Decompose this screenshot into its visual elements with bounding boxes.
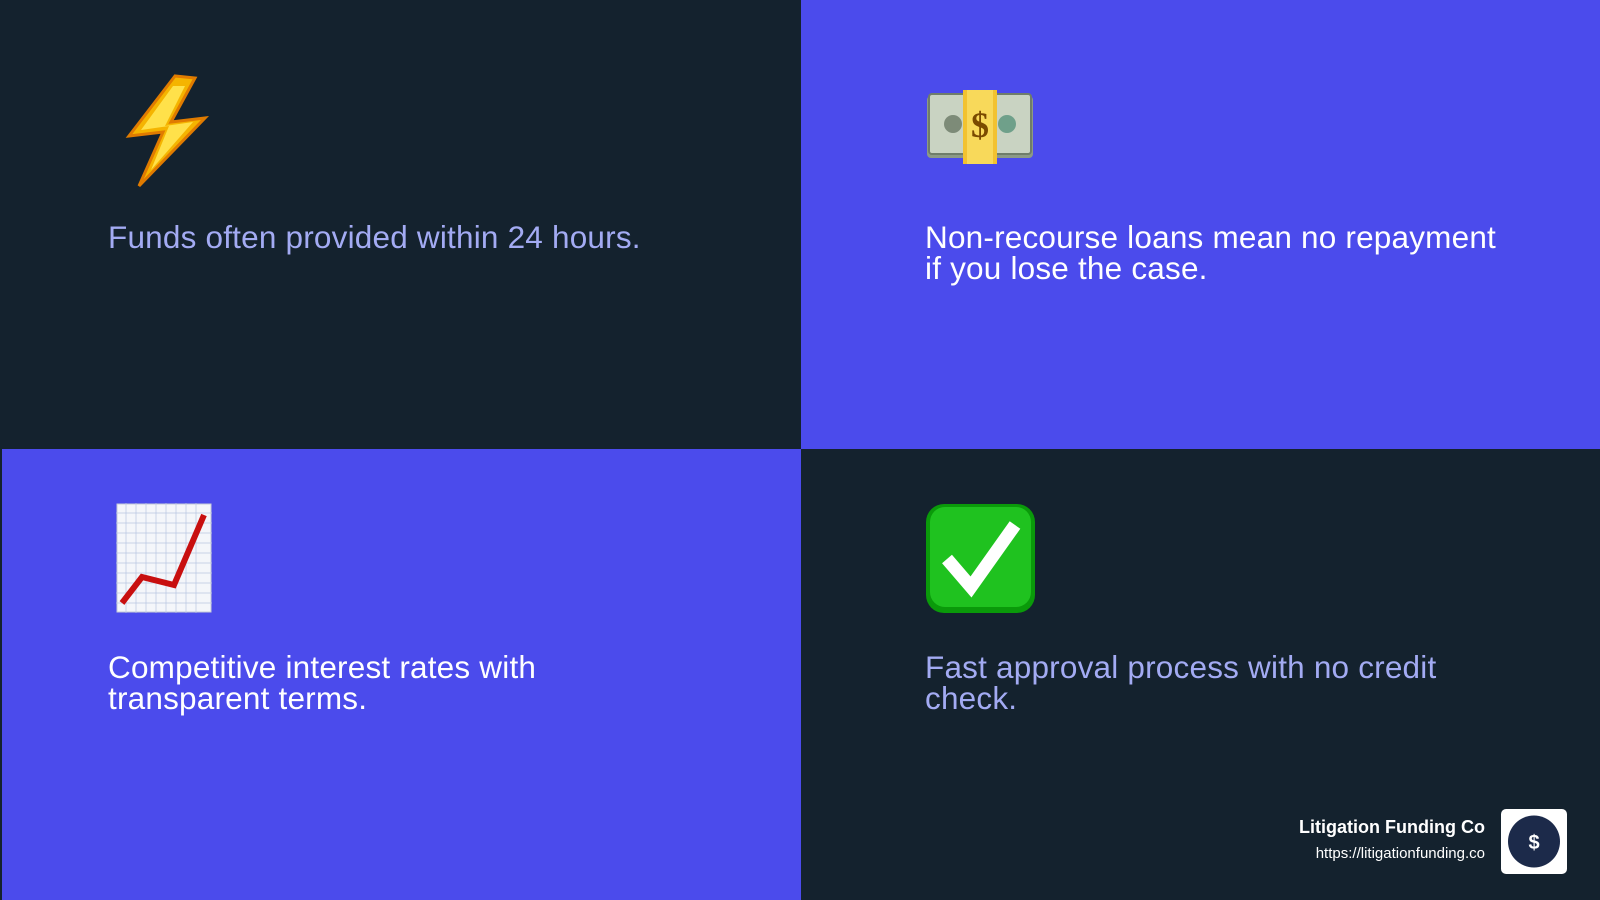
text: approval: check. — [925, 680, 1017, 716]
text: rates: Competitive interest rates with — [108, 649, 536, 685]
text: non-recourse — [925, 219, 1496, 286]
logo: $ — [1528, 832, 1540, 854]
icon: chart — [116, 503, 212, 613]
text: approval — [925, 649, 1436, 716]
text: non-recourse: if you lose the case. — [925, 250, 1208, 286]
panel: bottom-right approval — [801, 449, 1600, 900]
icon: money: $ — [971, 105, 989, 145]
icon: money — [927, 90, 1033, 164]
text: approval: Fast approval process with no credit — [925, 649, 1436, 685]
panel: top-left fast funds — [2, 0, 801, 449]
panel: top-right non-recourse — [801, 0, 1600, 449]
icon: lightning — [126, 74, 209, 187]
text: rates: transparent terms. — [108, 680, 367, 716]
panel: bottom-left rates — [2, 449, 801, 900]
text: rates — [108, 649, 536, 716]
logo — [1501, 809, 1567, 874]
brand block — [1299, 809, 1567, 874]
text: funds: Funds often provided within 24 hours. — [108, 219, 641, 255]
text: non-recourse: Non-recourse loans mean no repayment — [925, 219, 1496, 255]
brand name: Litigation Funding Co — [1299, 817, 1485, 837]
icon: check — [926, 504, 1035, 613]
brand url: https://litigationfunding.co — [1316, 845, 1485, 862]
